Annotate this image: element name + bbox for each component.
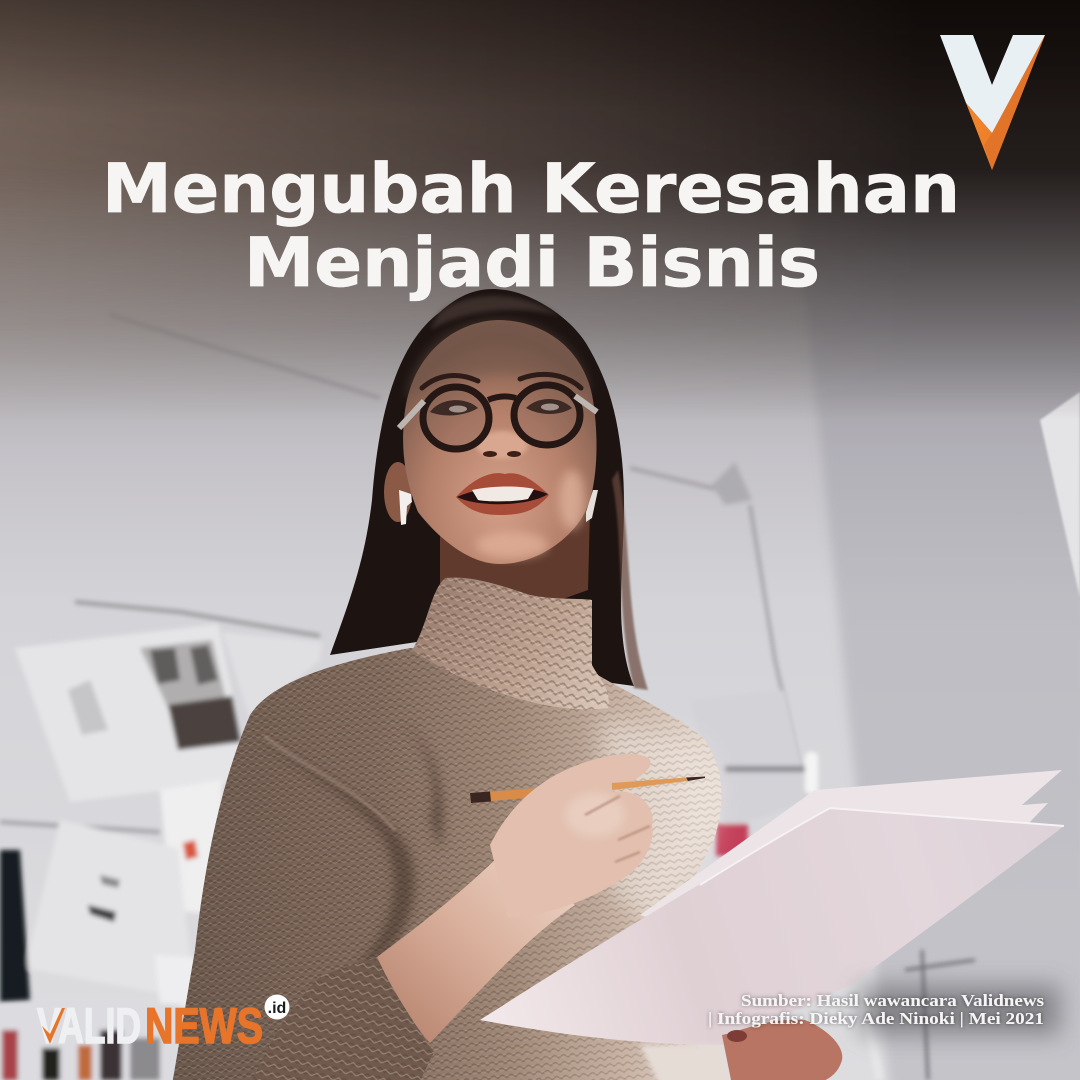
hair crown sheen xyxy=(430,296,560,330)
background: clothes at bottom left xyxy=(0,1004,180,1080)
papers front sheet xyxy=(480,808,1064,1045)
woman xyxy=(172,289,1064,1080)
hand xyxy=(490,754,653,918)
face xyxy=(403,320,597,564)
mouth opening xyxy=(457,488,548,504)
logo: Validnews wordmark: VALID xyxy=(37,998,141,1054)
logo: Validnews wordmark: .id xyxy=(268,1000,286,1017)
pencil body xyxy=(470,783,612,803)
hand highlight xyxy=(565,793,625,837)
turtleneck collar xyxy=(412,577,609,709)
neck xyxy=(440,510,590,600)
finger lines xyxy=(585,796,650,862)
title: Menjadi Bisnis xyxy=(244,224,820,303)
lower hand xyxy=(722,1020,842,1080)
eyes xyxy=(430,399,572,415)
nose xyxy=(476,431,528,459)
sweater highlight near right edge xyxy=(600,715,717,930)
hair back xyxy=(330,289,634,686)
logo: V mark top right xyxy=(940,35,1045,170)
background: wall rail and lamp xyxy=(110,315,800,770)
top dark gradient overlay xyxy=(0,0,1080,420)
logo: Validnews wordmark xyxy=(37,994,290,1054)
ear left xyxy=(384,462,412,522)
logo: Validnews wordmark: NEWS xyxy=(145,998,263,1054)
papers back sheet xyxy=(640,770,1062,980)
earbud left xyxy=(399,490,412,525)
sweater body xyxy=(172,648,721,1080)
glasses xyxy=(399,385,597,449)
eyebrows xyxy=(422,374,581,388)
forearm xyxy=(377,850,575,1043)
pencil tip xyxy=(612,776,705,790)
collar rib texture xyxy=(412,577,609,709)
background: pinned sketches on the right xyxy=(690,690,975,1080)
front sheet top edge highlight xyxy=(700,808,1064,885)
hair side highlights xyxy=(612,470,648,690)
chin light xyxy=(476,532,548,558)
title: Mengubah Keresahan xyxy=(102,150,960,229)
source credit: Sumber: Hasil wawancara Validnews xyxy=(741,991,1045,1010)
dark blur behind source credit xyxy=(860,985,1060,1035)
sweater knit texture xyxy=(172,648,721,1080)
teeth xyxy=(472,486,534,501)
sleeve cuff xyxy=(250,957,434,1080)
cuff knit texture xyxy=(250,957,434,1080)
background: pinned sketches on the left xyxy=(0,602,322,1008)
source credit: | Infografis: Dieky Ade Ninoki | Mei 2021 xyxy=(708,1009,1044,1028)
thumbnail xyxy=(727,1030,747,1042)
cheek shine xyxy=(559,470,585,530)
title xyxy=(102,150,960,303)
lips xyxy=(456,473,549,515)
source credit xyxy=(708,991,1045,1028)
background: white panel at right edge xyxy=(1040,392,1080,598)
sweater pale hem below paper xyxy=(640,1045,730,1080)
earbud right xyxy=(586,490,598,522)
forehead shade xyxy=(406,320,590,398)
shoulder seam and arm fold shadow xyxy=(262,720,443,975)
shoulder seam ridge xyxy=(264,736,395,830)
